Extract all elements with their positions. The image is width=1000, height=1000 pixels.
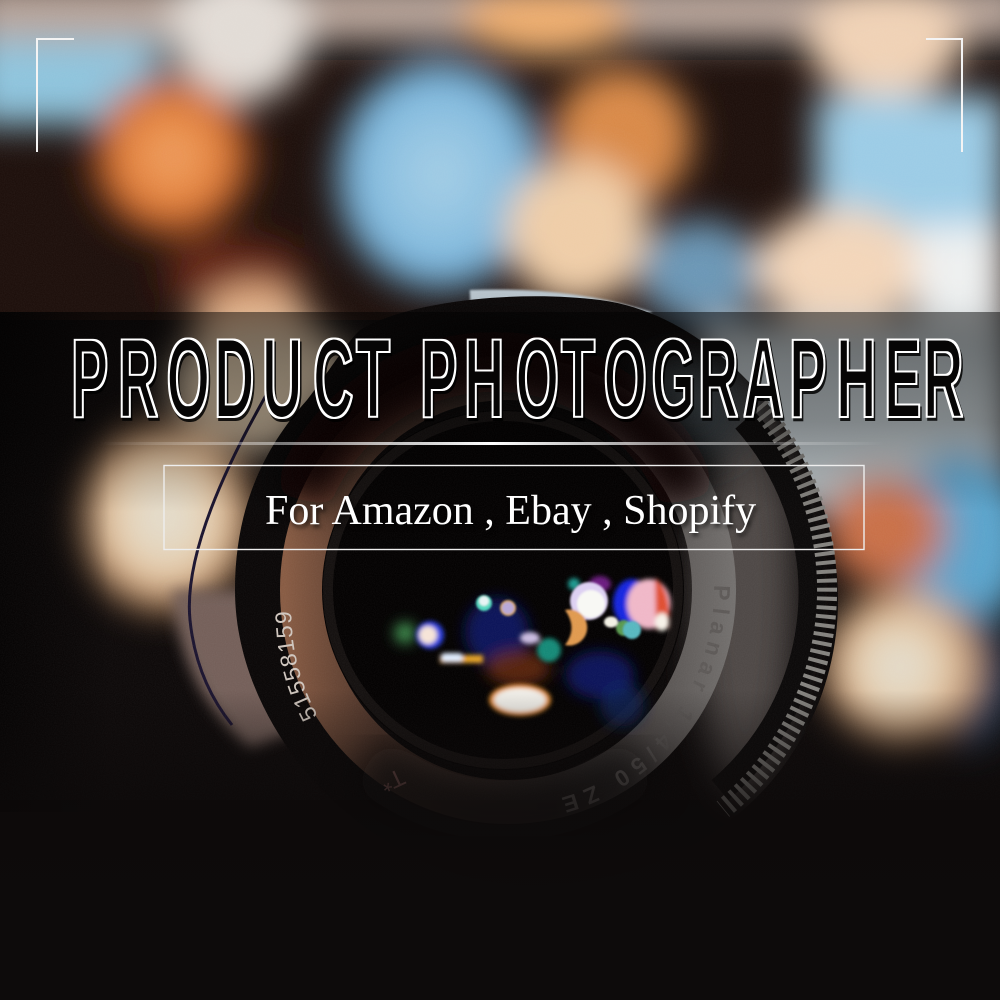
ring engraving: Planar 1,4/50 ZE (562, 586, 730, 812)
ring engraving (275, 586, 730, 812)
camera lens (167, 288, 838, 817)
knurled focus ring (720, 420, 812, 790)
subtitle box (164, 466, 864, 550)
divider (100, 442, 885, 445)
bottom dark fade (0, 690, 1000, 900)
lens barrel (235, 296, 838, 885)
title band overlay (0, 312, 1000, 512)
bottom shade over lens ring (370, 760, 640, 811)
grey barrel shading (630, 360, 795, 800)
front glass (322, 410, 684, 770)
ring engraving: 51558159 (275, 612, 316, 722)
left shadow (0, 312, 110, 812)
lens top highlight (470, 295, 650, 318)
grain texture (0, 0, 1000, 800)
ring engraving: T* (376, 763, 409, 797)
outer rim crescent (172, 590, 300, 748)
corner bracket: top left (37, 39, 74, 152)
title: PRODUCT PHOTOGRAPHER (71, 316, 963, 441)
subtitle box: For Amazon , Ebay , Shopify (265, 488, 756, 534)
lens ring with engraving band (302, 378, 714, 802)
corner bracket: top right (926, 39, 962, 152)
coloured reflections (395, 598, 644, 727)
top shade over lens ring (300, 362, 690, 500)
